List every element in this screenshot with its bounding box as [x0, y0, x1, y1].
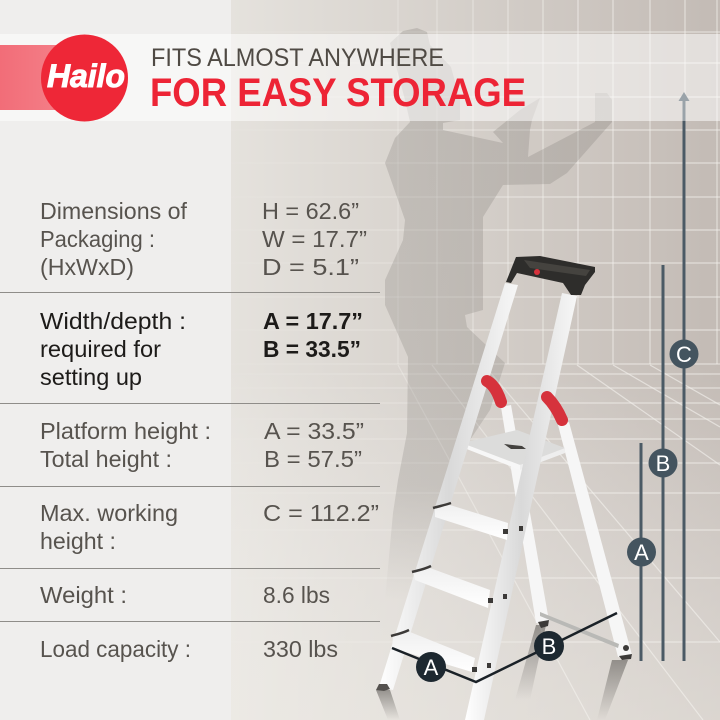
spec: packaging dimensions	[40, 198, 367, 280]
spec: heights: Platform height :	[40, 418, 211, 444]
title: FITS ALMOST ANYWHERE	[151, 44, 444, 72]
title	[150, 44, 526, 115]
red handles	[487, 381, 562, 420]
platform	[462, 430, 565, 470]
spec: width and depth: required for	[40, 336, 161, 362]
dimension line C with arrow	[678, 92, 690, 661]
Hailo logo: Hailo	[47, 58, 125, 94]
dimension line A	[640, 443, 642, 661]
base measurement lines	[392, 613, 617, 682]
spec: load capacity	[40, 636, 338, 662]
dimension lines	[640, 92, 690, 661]
spec: weight: Weight :	[40, 582, 127, 608]
spec: packaging dimensions: Packaging :	[40, 226, 155, 252]
dimension line B	[662, 265, 664, 661]
badge: height C	[670, 340, 698, 368]
worker silhouette	[385, 28, 612, 600]
ladder	[376, 256, 632, 720]
badge: base A	[416, 652, 446, 682]
step 1	[433, 503, 523, 540]
right rail	[465, 293, 577, 720]
spec: packaging dimensions: Dimensions of	[40, 198, 188, 224]
spec: width and depth: B = 33.5”	[263, 336, 361, 362]
spec: width and depth: setting up	[40, 364, 142, 390]
badge: height B: B	[656, 451, 670, 476]
row dividers	[0, 292, 380, 622]
front foot	[376, 684, 390, 691]
spec: packaging dimensions: D = 5.1”	[262, 254, 359, 280]
red accent bar	[0, 45, 62, 110]
badge: height C: C	[676, 342, 692, 367]
spec: working height	[40, 500, 379, 554]
spec: packaging dimensions: W = 17.7”	[262, 226, 367, 252]
spec: width and depth	[40, 308, 363, 390]
badge: height A	[627, 538, 656, 566]
title: FOR EASY STORAGE	[150, 71, 526, 115]
floor shadows	[376, 625, 628, 720]
spec: weight	[40, 582, 330, 608]
spec: packaging dimensions: (HxWxD)	[40, 254, 134, 280]
spec: working height: height :	[40, 528, 116, 554]
badge: height A: A	[634, 540, 649, 565]
Hailo logo	[41, 34, 128, 122]
badge: height B	[648, 448, 678, 478]
back legs	[501, 405, 632, 657]
spec: heights: A = 33.5”	[264, 418, 364, 444]
spec: heights: B = 57.5”	[264, 446, 362, 472]
spec: working height: C = 112.2”	[263, 500, 379, 526]
left rail	[379, 283, 518, 690]
spec: width and depth: A = 17.7”	[263, 308, 363, 334]
spec: load capacity: Load capacity :	[40, 636, 191, 662]
badge: base B: B	[542, 634, 556, 659]
spec: width and depth: Width/depth :	[40, 308, 186, 334]
spec: heights	[40, 418, 364, 472]
top tray	[506, 256, 595, 295]
rear cross brace	[540, 612, 619, 648]
badge: base B	[534, 631, 564, 661]
wall and floor grid	[231, 0, 720, 720]
spec: packaging dimensions: H = 62.6”	[262, 198, 359, 224]
spec: weight: 8.6 lbs	[263, 582, 330, 608]
spec: heights: Total height :	[40, 446, 172, 472]
header band	[0, 34, 720, 121]
step 3	[391, 630, 491, 672]
rear feet	[538, 620, 632, 660]
spec: load capacity: 330 lbs	[263, 636, 338, 662]
step 2	[412, 566, 507, 608]
badge: base A: A	[424, 655, 439, 680]
spec: working height: Max. working	[40, 500, 178, 526]
